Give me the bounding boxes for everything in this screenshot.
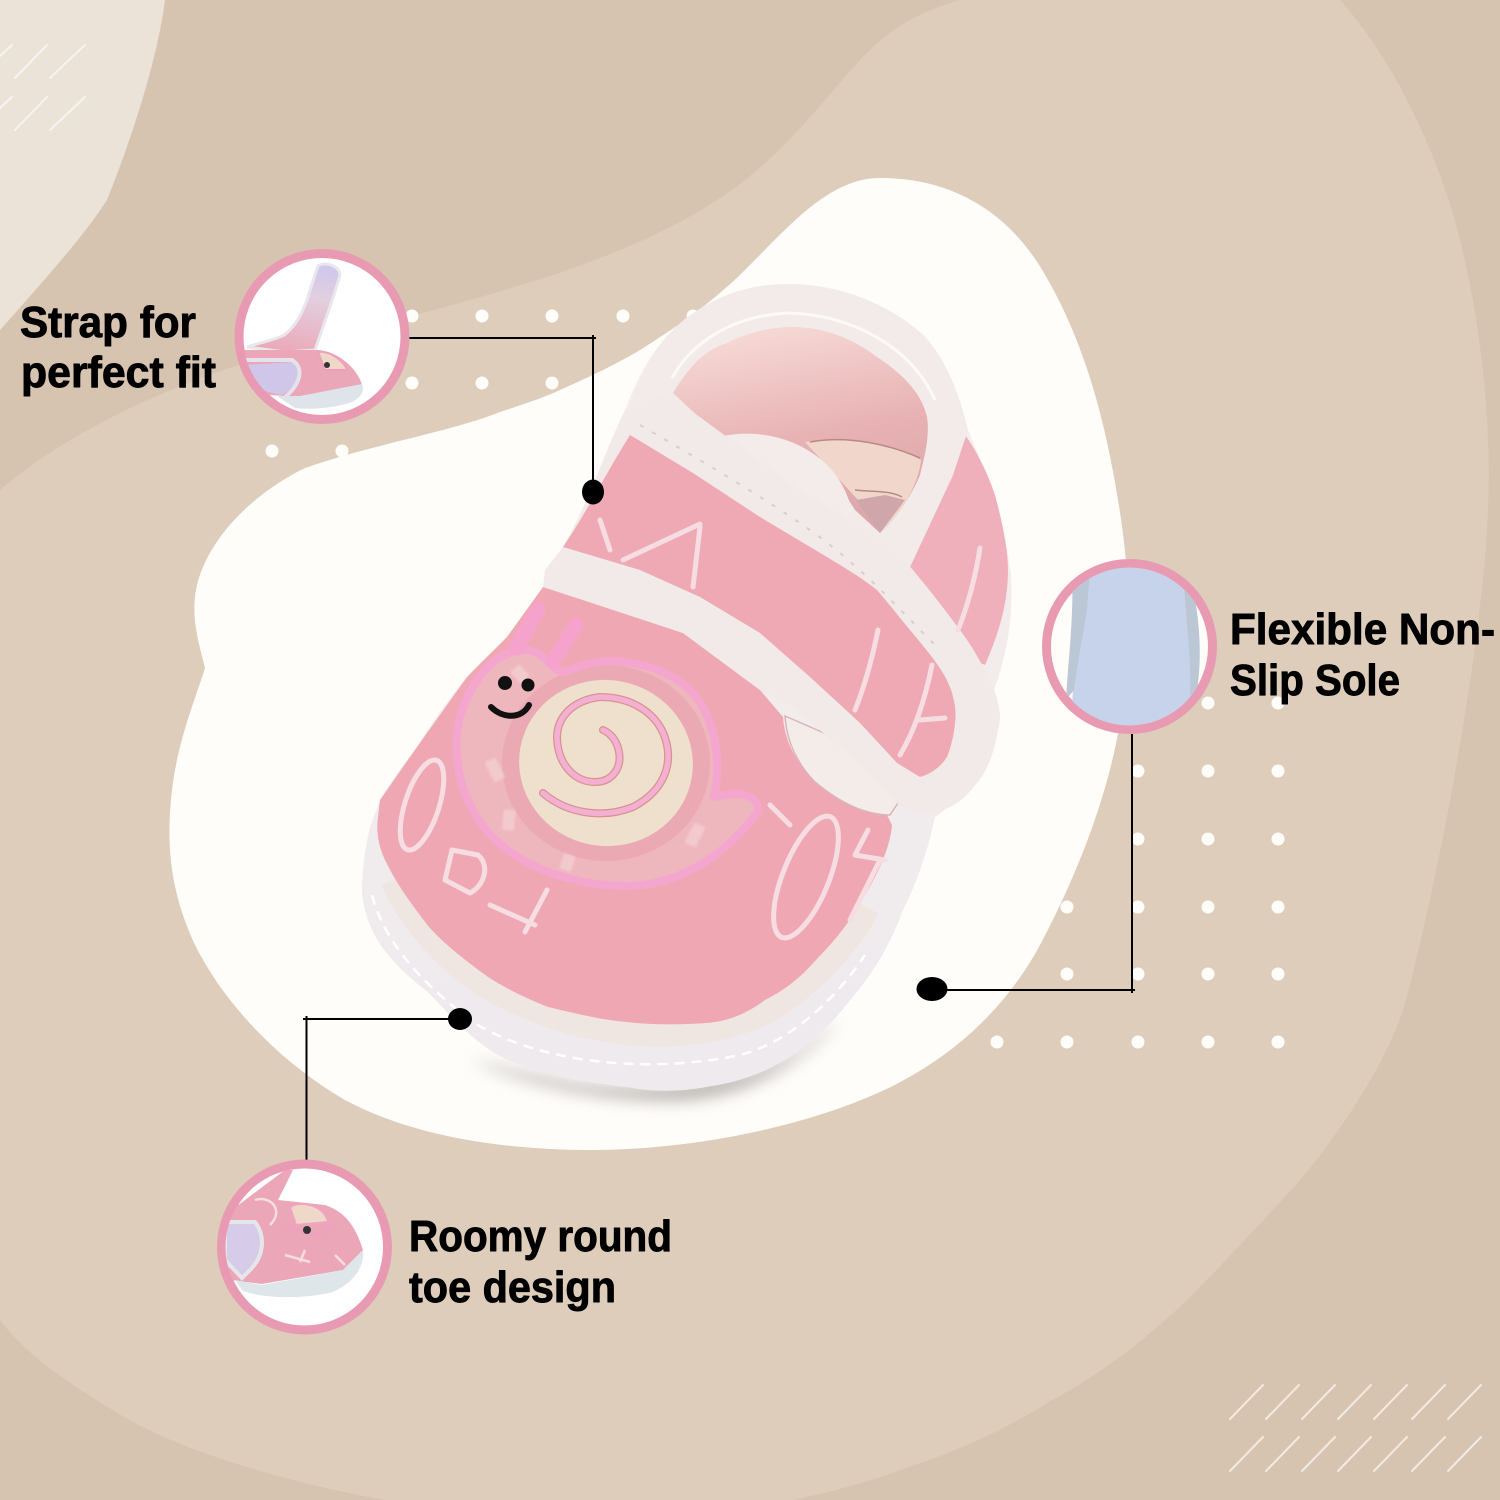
antennae	[516, 610, 576, 660]
collar inner highlight	[672, 313, 935, 400]
insole shadow	[856, 495, 905, 533]
snail body	[457, 650, 758, 886]
insole	[805, 440, 921, 533]
spiral	[543, 697, 668, 813]
strap band	[543, 393, 1000, 814]
label: sole: Flexible Non-	[1230, 605, 1495, 654]
shell ring shade	[502, 665, 710, 861]
shoe ground shadow	[470, 1020, 840, 1100]
hatch top-left	[0, 45, 85, 130]
label: strap: Strap for	[20, 298, 196, 347]
label: toe: toe design	[409, 1263, 616, 1312]
label: sole	[1230, 605, 1495, 705]
inside of shoe	[673, 327, 928, 533]
heel side pink	[910, 432, 1008, 665]
label: sole: Slip Sole	[1230, 656, 1400, 705]
callout circle: strap	[239, 254, 405, 420]
strap letters	[600, 520, 980, 755]
collar outer	[625, 284, 968, 567]
dots top-left grid	[266, 310, 700, 458]
white blob behind shoe	[169, 178, 1128, 1150]
snail shell	[506, 666, 706, 860]
label: strap: perfect fit	[21, 348, 216, 397]
product: baby shoe	[362, 284, 1012, 1100]
callout circle: sole	[1046, 555, 1212, 735]
callout circle: toe	[222, 1164, 388, 1330]
connector: strap	[409, 335, 604, 504]
connector: toe	[303, 1008, 472, 1161]
label: strap	[20, 298, 216, 397]
tab under strap	[785, 716, 900, 815]
strap pink	[563, 435, 956, 777]
toe upper pink	[377, 587, 892, 1024]
shoe silhouette	[362, 284, 1012, 1091]
dots right grid	[920, 696, 1284, 1048]
snail decoration	[457, 610, 758, 886]
snail face	[491, 676, 534, 716]
label: toe	[409, 1212, 672, 1312]
top-left pale blob	[0, 0, 165, 330]
sole inner band	[392, 880, 868, 1034]
body highlights	[490, 668, 700, 870]
hatch bottom-right	[1230, 1385, 1481, 1471]
label: toe: Roomy round	[409, 1212, 672, 1261]
snail outline	[457, 650, 758, 886]
tongue	[720, 434, 856, 540]
sole stitching	[372, 895, 865, 1064]
connector: sole	[916, 734, 1135, 1001]
spiral shadow	[543, 697, 668, 813]
toe letters	[391, 755, 885, 946]
strap stitch	[640, 425, 935, 645]
